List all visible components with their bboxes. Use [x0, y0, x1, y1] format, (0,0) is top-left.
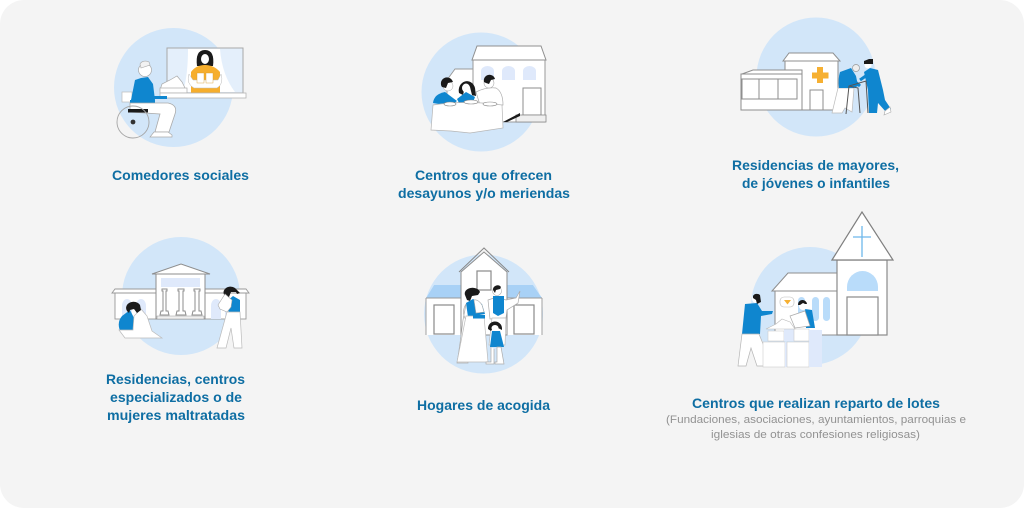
panel: comedores sociales: [112, 28, 249, 183]
icon: family in front of a house: [424, 248, 543, 374]
icon: wheelchair user at a food window: [114, 28, 246, 147]
label: (Fundaciones, asociaciones, ayuntamientos, parroquias e: [666, 414, 966, 426]
label: especializados o de: [110, 389, 242, 405]
panel: hogares de acogida: [417, 248, 550, 413]
panel: residencias de mayores: [732, 18, 899, 191]
label: [398, 167, 570, 201]
label: Residencias de mayores,: [732, 157, 899, 173]
label: [666, 395, 966, 441]
label: Centros que realizan reparto de lotes: [692, 395, 940, 411]
label: iglesias de otras confesiones religiosas): [711, 429, 920, 441]
panel: reparto de lotes: [666, 212, 966, 441]
icon: people at a table before a building: [422, 32, 546, 152]
label: de jóvenes o infantiles: [742, 175, 890, 191]
panel: residencias y centros especializados: [106, 237, 249, 423]
label: Comedores sociales: [112, 167, 249, 183]
icon: care home with carer and walker: [741, 18, 891, 136]
panel: desayunos y meriendas: [398, 32, 570, 201]
label: desayunos y/o meriendas: [398, 185, 570, 201]
label: Residencias, centros: [106, 371, 245, 387]
icon: institution with two women: [112, 237, 249, 355]
label: Hogares de acogida: [417, 397, 550, 413]
label: [106, 371, 245, 423]
label: Centros que ofrecen: [415, 167, 552, 183]
label: mujeres maltratadas: [107, 407, 245, 423]
label: [732, 157, 899, 191]
icon: church with volunteers and boxes: [738, 212, 893, 367]
